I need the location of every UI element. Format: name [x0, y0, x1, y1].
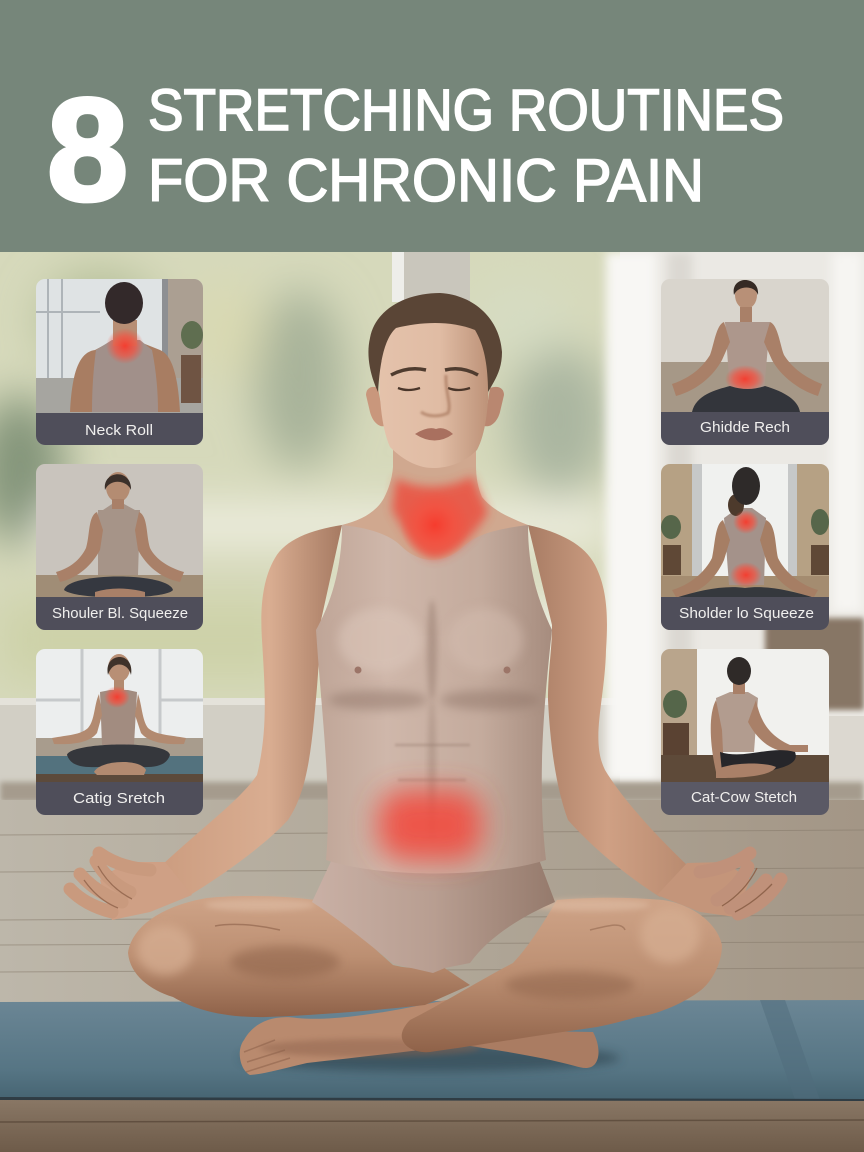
leg: right thigh and knee	[402, 898, 722, 1052]
label bar: Sholder lo Squeeze	[679, 605, 814, 622]
singlet top	[316, 490, 552, 874]
nose	[421, 375, 449, 416]
figure	[672, 280, 822, 412]
title: STRETCHING ROUTINES	[148, 78, 784, 143]
head	[366, 293, 504, 468]
thumbnail: Sholder lo Squeeze	[661, 464, 829, 630]
leg: left thigh and knee	[128, 896, 470, 1017]
pain highlight: abdomen	[378, 790, 482, 860]
label bar: Cat-Cow Stetch	[691, 789, 797, 806]
label bar	[36, 782, 203, 815]
thumbnail: Neck Roll	[36, 279, 203, 445]
figure	[711, 657, 808, 778]
figure	[70, 282, 180, 412]
figure	[52, 654, 186, 775]
background: yoga room with window and curtains	[0, 252, 864, 1152]
label bar	[661, 782, 829, 815]
figure	[56, 472, 184, 598]
label bar: Ghidde Rech	[700, 419, 790, 436]
label bar	[36, 413, 203, 445]
title: 8	[47, 68, 128, 231]
neck	[342, 450, 528, 560]
figure	[672, 467, 818, 598]
brows	[391, 369, 478, 375]
yoga mat	[0, 1000, 864, 1101]
label bar	[661, 412, 829, 445]
shin and foot: left	[240, 995, 500, 1075]
thumbnail: Shoulder Blade Squeeze	[36, 464, 203, 630]
pain highlight: neck	[392, 476, 488, 559]
header band	[0, 0, 864, 252]
central figure: seated meditating man	[70, 293, 781, 1075]
thumbnail: Catig Sretch	[36, 649, 203, 815]
hand: left	[70, 853, 192, 920]
hand: right	[657, 853, 781, 917]
closed eyes	[398, 388, 470, 390]
arm: right	[528, 525, 687, 897]
label bar: Neck Roll	[85, 422, 153, 439]
title: FOR CHRONIC PAIN	[148, 147, 704, 214]
label bar: Catig Sretch	[73, 790, 165, 807]
label bar	[661, 597, 829, 630]
label bar	[36, 597, 203, 630]
label bar: Shouler Bl. Squeeze	[52, 605, 188, 622]
figure shadow on mat	[240, 1044, 620, 1072]
thumbnail: Cat-Cow Stetch	[661, 649, 829, 815]
mouth	[415, 428, 453, 440]
thumbnail: Ghidde Rech	[661, 279, 829, 445]
arm: left	[162, 525, 342, 897]
hair	[368, 293, 502, 392]
title	[47, 68, 784, 231]
chest and abdominal shading	[328, 602, 536, 795]
shorts	[312, 857, 555, 973]
foot: right, tucked under knee	[470, 1030, 599, 1068]
